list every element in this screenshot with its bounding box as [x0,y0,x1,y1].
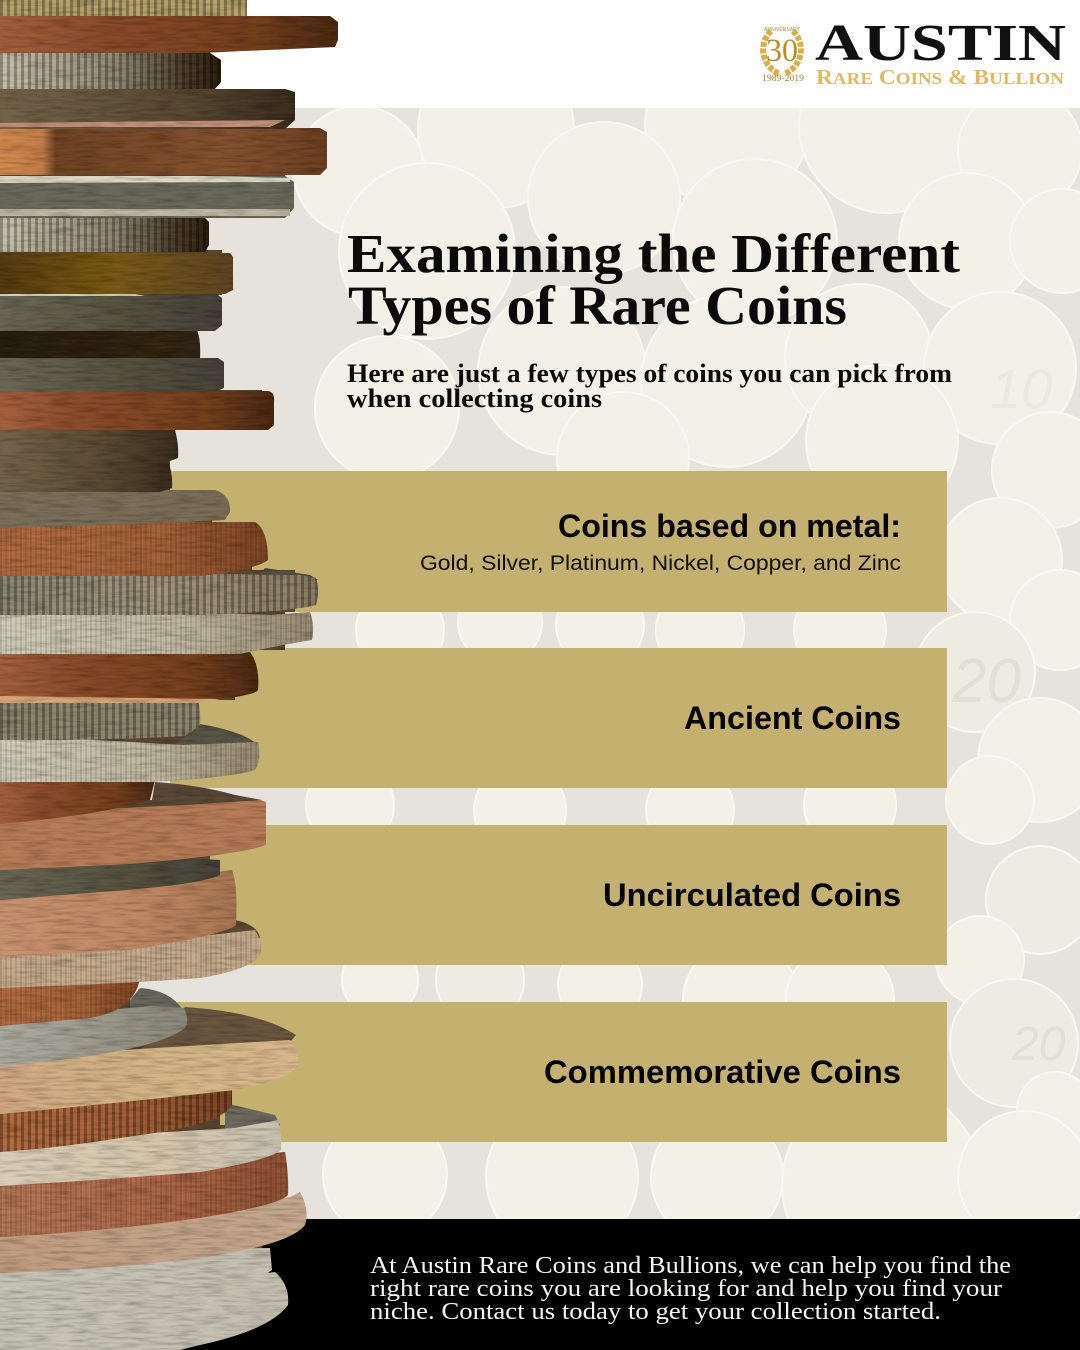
panel: coins based on metal: Coins based on metal: [558,508,901,544]
panel: uncirculated coins [170,825,947,965]
logo wordmark: AUSTIN [815,15,1066,72]
panel: uncirculated coins: Uncirculated Coins [603,877,901,913]
background: faded coins pattern [130,108,1080,1219]
logo tagline: RARE COINS & B ULLION [816,65,1065,89]
panel: ancient coins [170,648,947,788]
footer band with call to action: At Austin Rare Coins and Bullions, we can help you find the [370,1253,1011,1279]
panel: ancient coins: Ancient Coins [684,700,901,736]
footer band with call to action [0,1219,1080,1350]
image: stack of coins [0,0,338,1350]
title: Examining the Different [347,223,961,284]
icon: 30 years anniversary wreath: 30 [766,33,798,69]
subtitle: when collecting coins [347,384,602,413]
logo: Austin Rare Coins & Bullion [762,15,1066,89]
panel: coins based on metal [170,471,947,612]
background: faded coins pattern: 20 [1011,1018,1066,1071]
panel: commemorative coins: Commemorative Coins [544,1054,901,1090]
footer band with call to action: right rare coins you are looking for and help you find your [370,1276,1002,1302]
background: faded coins pattern: 10 [990,357,1052,420]
title [347,223,961,336]
icon: 30 years anniversary wreath: 1989-2019 [762,73,805,83]
subtitle: Here are just a few types of coins you can pick from [347,359,952,388]
panel: coins based on metal: Gold, Silver, Platinum, Nickel, Copper, and Zinc [420,551,901,575]
background: faded coins pattern: 20 [951,647,1021,716]
icon: 30 years anniversary wreath [762,27,805,83]
subtitle [347,359,952,413]
icon: 30 years anniversary wreath: ANNIVERSARY [764,27,801,33]
footer band with call to action: niche. Contact us today to get your collection started. [370,1299,941,1325]
title: Types of Rare Coins [348,275,847,336]
panel: commemorative coins [170,1002,947,1142]
